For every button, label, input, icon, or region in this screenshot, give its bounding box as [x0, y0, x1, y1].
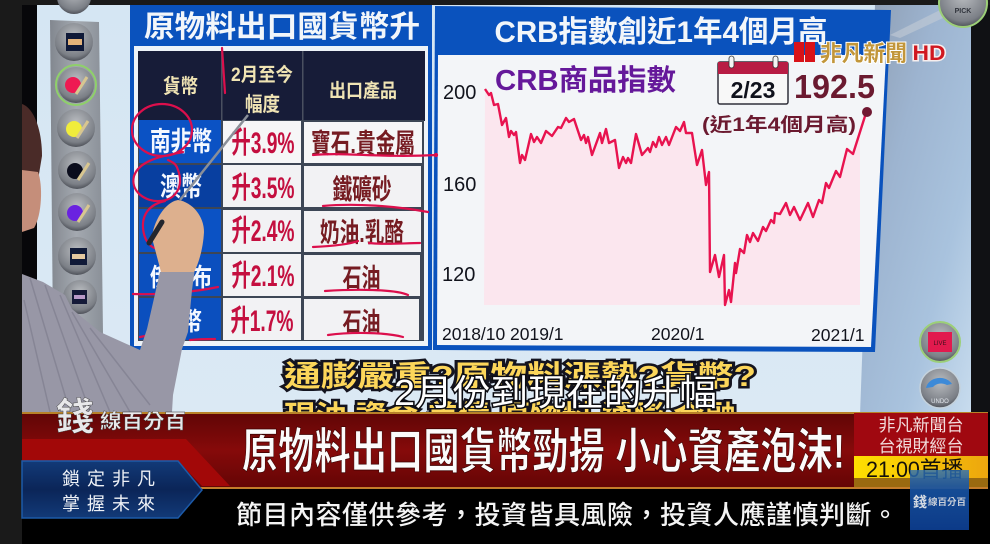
row: South African rand: 南非幣	[150, 127, 212, 157]
row: Australian dollar: 升3.5%	[232, 172, 294, 205]
watermark logo: 錢	[913, 494, 927, 510]
subtitle: yellow banner text: 通膨嚴重?原物料漲勢?貨幣?	[284, 360, 756, 393]
row: Russian ruble: 石油	[342, 263, 380, 293]
y axis labels	[442, 82, 476, 286]
sweater body and arm	[22, 268, 195, 412]
icon: team bottom	[63, 280, 97, 314]
y axis labels: 160	[443, 174, 476, 196]
x axis labels: 2021/1	[811, 325, 865, 345]
logo: show name	[56, 397, 186, 439]
icon: undo button	[920, 368, 960, 408]
tag: slogan: 鎖定非凡	[62, 469, 155, 489]
row: Russian ruble: 升2.1%	[232, 260, 294, 293]
x axis labels: 2020/1	[651, 324, 705, 344]
icon: draw purple	[58, 193, 96, 231]
table header row: 幅度	[245, 93, 280, 116]
channel logo: HD	[912, 42, 946, 65]
row: New Zealand dollar	[139, 209, 421, 252]
table header row	[138, 51, 425, 121]
logo: show name: 線百分百	[100, 410, 186, 433]
row: Australian dollar	[139, 165, 421, 207]
caption: white subtitle: 2月份到現在的升幅	[394, 372, 717, 413]
tag: slogan: 掌握未來	[62, 494, 155, 514]
channel logo: 非凡新聞	[820, 41, 907, 66]
table header row: 貨幣	[163, 75, 198, 98]
table header row: 2月至今	[231, 63, 293, 86]
row: Canadian dollar: 升1.7%	[230, 305, 294, 338]
row: Canadian dollar: 加幣	[160, 308, 202, 336]
panel: CRB chart	[433, 6, 891, 352]
row: Australian dollar: 鐵礦砂	[332, 174, 392, 205]
icon: team	[55, 23, 93, 61]
icon: draw yellow	[57, 109, 95, 147]
schedule box: 非凡新聞台	[878, 416, 964, 435]
row: South African rand	[139, 120, 422, 163]
headline: 原物料出口國貨幣勁揚 小心資產泡沫!	[242, 425, 845, 479]
presenter	[22, 104, 248, 412]
y axis labels: 200	[443, 82, 476, 104]
end point marker	[862, 107, 872, 117]
icon: pick button	[939, 0, 987, 27]
row: Russian ruble	[139, 254, 420, 296]
hand	[152, 200, 204, 272]
icon: undo button: UNDO	[931, 399, 949, 405]
icon: pick button: PICK	[955, 8, 971, 15]
callout note: (近1年4個月高)	[702, 113, 856, 136]
row: South African rand: 升3.9%	[232, 127, 294, 160]
icon: draw red	[56, 65, 96, 105]
schedule box	[854, 413, 988, 487]
lower third red band	[22, 412, 990, 544]
schedule box: 台視財經台	[878, 437, 964, 456]
icon: calendar 2/23: 2/23	[731, 77, 775, 103]
row: New Zealand dollar: 升2.4%	[232, 215, 294, 248]
table grid background	[138, 120, 424, 341]
row: South African rand: 寶石.貴金屬	[311, 129, 415, 159]
subtitle: yellow banner text: 現油.資金.美債.原物料.通膨.金融	[284, 400, 736, 433]
x axis labels: 2019/1	[510, 324, 564, 344]
watermark logo	[910, 470, 969, 530]
schedule box: 21:00首播	[866, 457, 963, 482]
watermark logo: 線百分百	[928, 496, 966, 507]
row: New Zealand dollar: 奶油.乳酪	[320, 218, 404, 248]
callout value: 192.5	[794, 68, 875, 105]
icon: draw black	[58, 151, 96, 189]
row: New Zealand dollar: 紐幣	[160, 217, 202, 247]
x axis labels: 2018/10	[442, 324, 506, 344]
disclaimer: 節目內容僅供參考，投資皆具風險，投資人應謹慎判斷。	[236, 500, 898, 530]
subtitle: yellow banner text	[284, 360, 756, 433]
row: Canadian dollar: 石油	[342, 307, 380, 337]
icon: live button: LIVE	[933, 341, 947, 347]
row: Russian ruble: 俄盧布	[150, 264, 212, 292]
logo: show name: 錢	[56, 397, 94, 439]
table header row: 出口產品	[329, 79, 397, 102]
icon: live button	[920, 322, 960, 362]
area fill under line	[484, 89, 860, 305]
row: Canadian dollar	[139, 298, 419, 340]
hand-drawn red annotations	[132, 48, 437, 340]
heading: currency rise: 原物料出口國貨幣升	[144, 11, 420, 44]
tool sidebar with draw icons	[50, 0, 103, 334]
hair and face	[22, 104, 42, 232]
row: Australian dollar: 澳幣	[160, 172, 202, 202]
channel logo	[794, 41, 946, 66]
icon: calendar 2/23	[718, 56, 788, 104]
panel: currency table	[130, 5, 432, 350]
pen	[149, 115, 248, 243]
x axis labels	[442, 324, 865, 345]
chart subtitle: CRB商品指數	[495, 64, 676, 97]
icon: team lower	[58, 237, 96, 275]
y axis labels: 120	[442, 264, 475, 286]
line chart: CRB index	[485, 89, 866, 305]
tag: slogan	[22, 461, 202, 518]
heading: CRB index: CRB指數創近1年4個月高	[494, 16, 828, 49]
